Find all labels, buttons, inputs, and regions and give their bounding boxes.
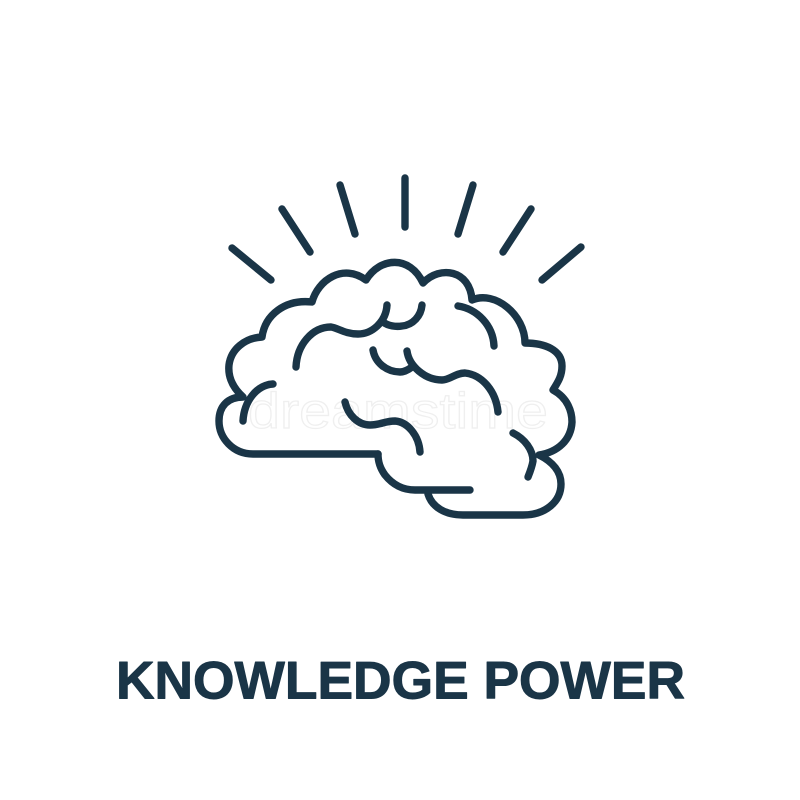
title: KNOWLEDGE POWER bbox=[116, 652, 685, 710]
watermark: dreamstime bbox=[248, 383, 548, 439]
icon: brain with radiating rays bbox=[219, 178, 581, 515]
icon: brain folds bbox=[243, 305, 533, 477]
icon: rays bbox=[232, 178, 581, 280]
icon: brain outline bbox=[219, 262, 572, 515]
